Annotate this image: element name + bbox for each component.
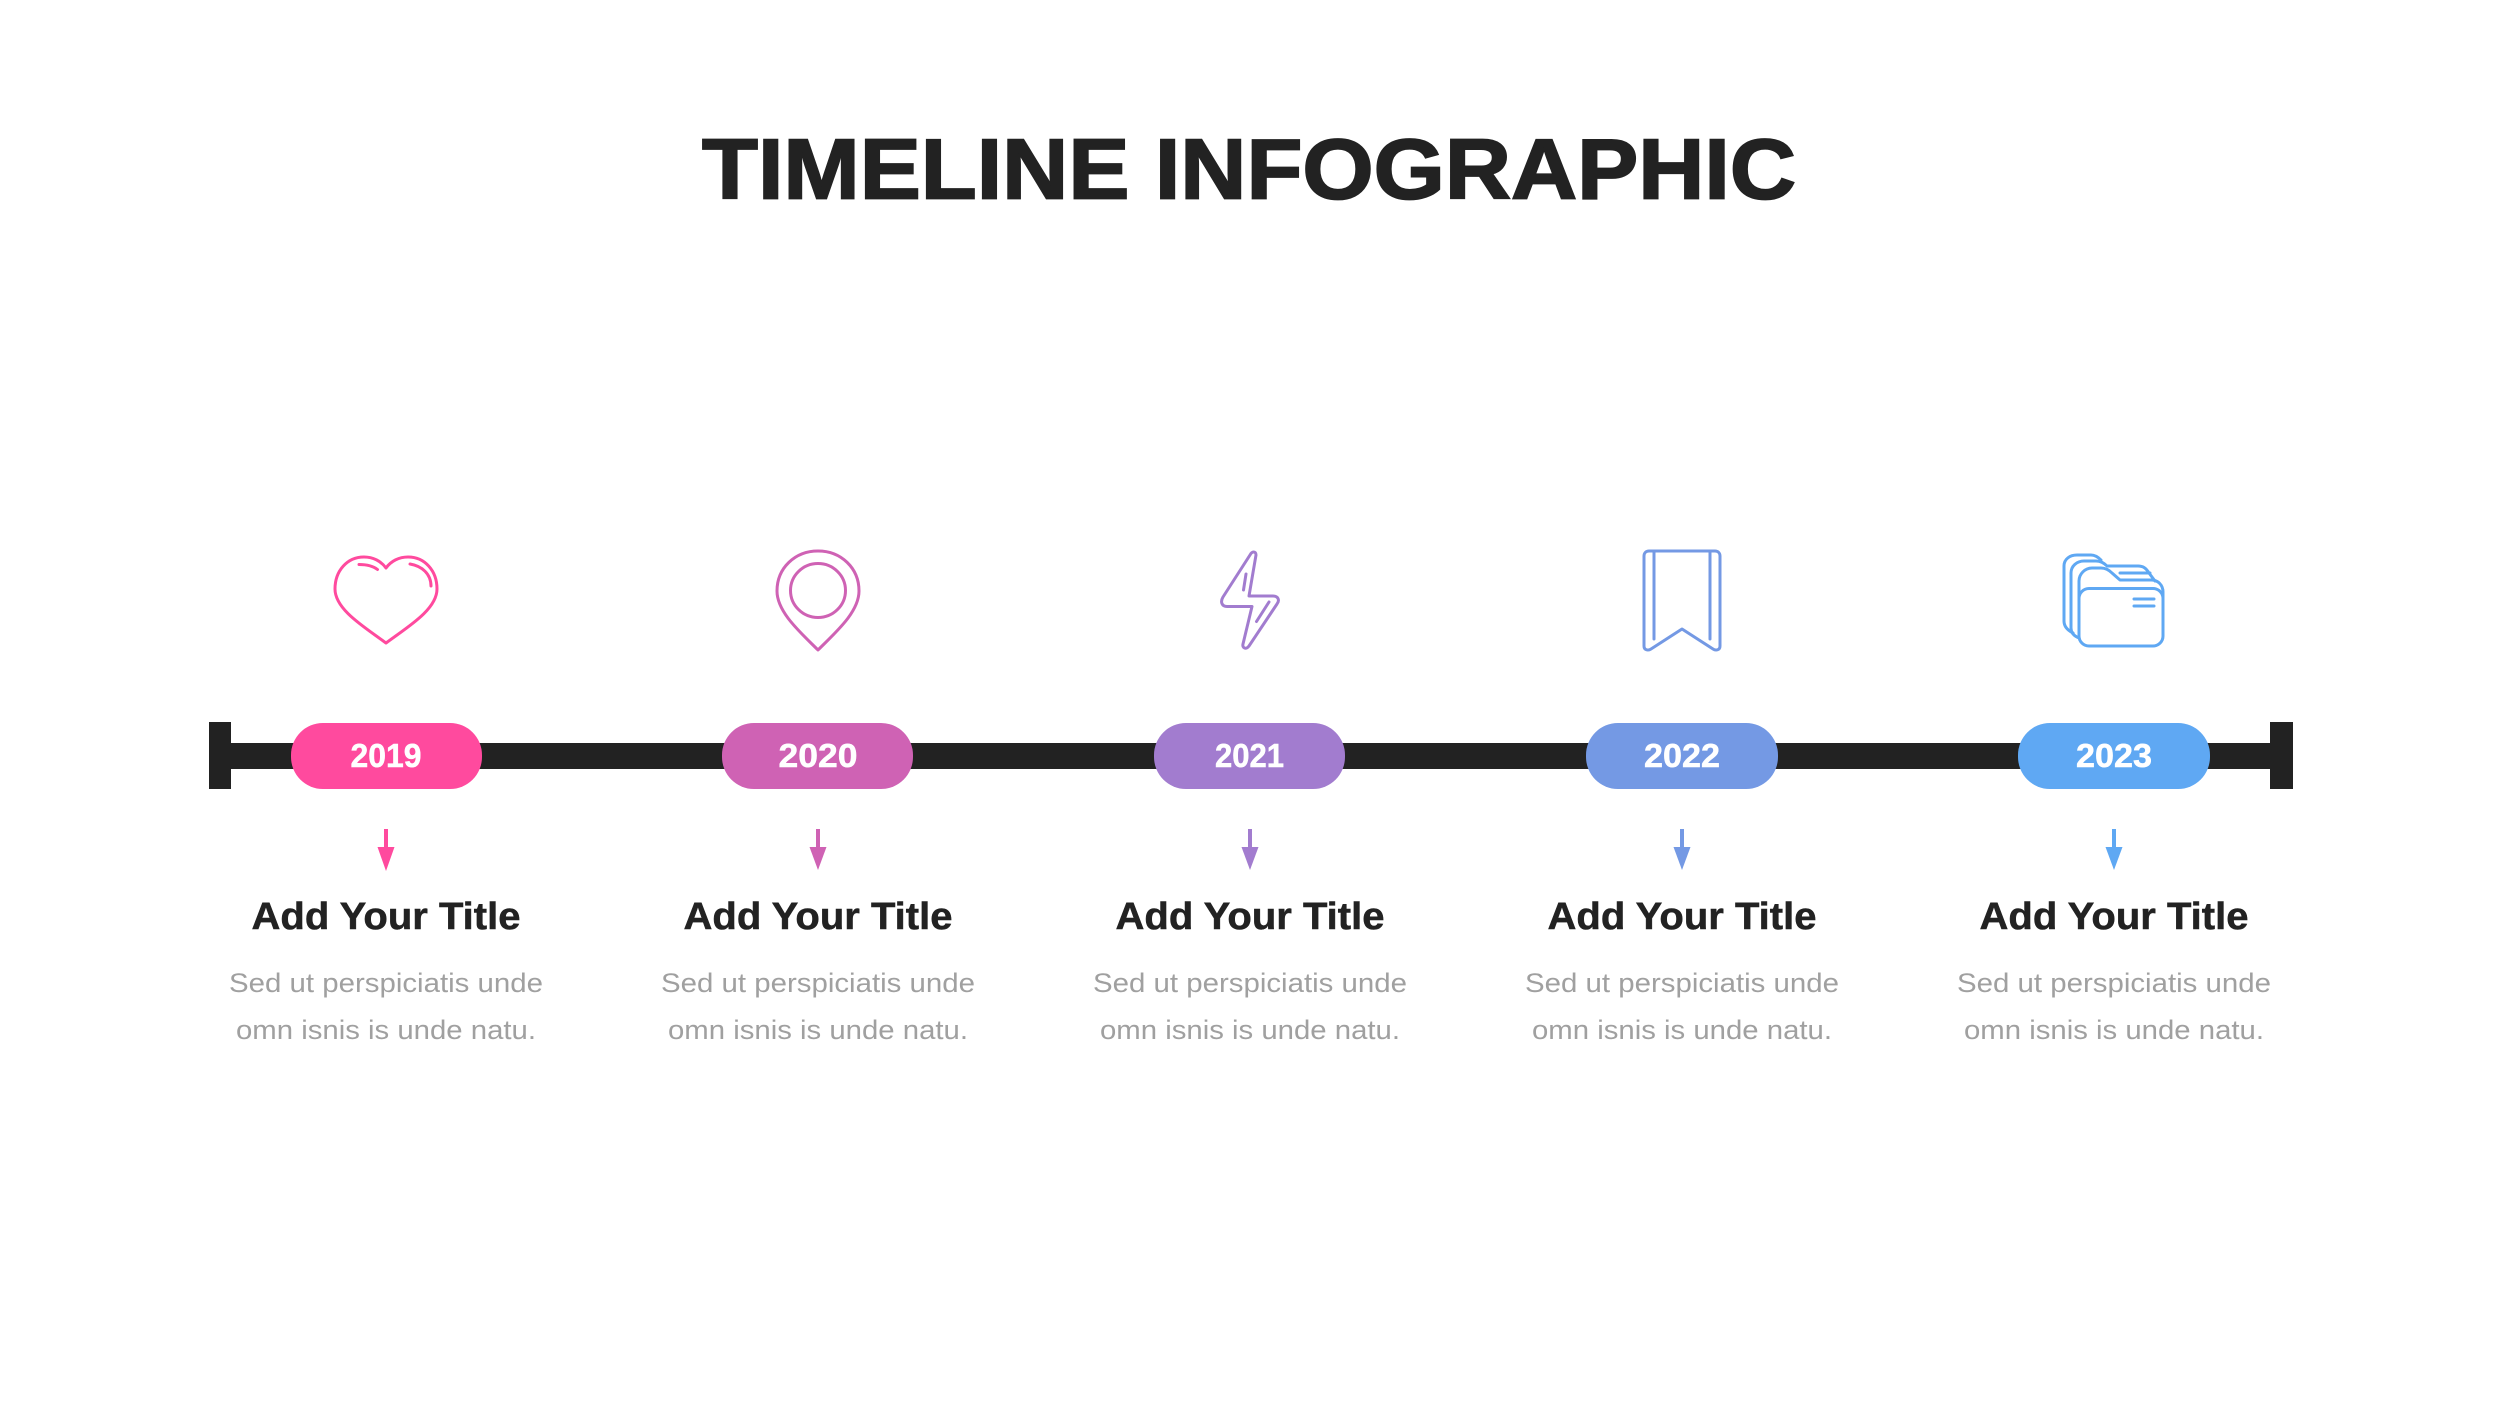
description (229, 968, 543, 1045)
item title: Add Your Title (684, 896, 952, 938)
description: omn isnis is unde natu. (1100, 1015, 1400, 1045)
description (1957, 968, 2271, 1045)
year pill: 2022 (1586, 723, 1778, 789)
arrow (1674, 829, 1690, 870)
icon: folders (2064, 555, 2163, 646)
description: omn isnis is unde natu. (236, 1015, 536, 1045)
arrow (810, 829, 826, 870)
year pill: 2021: 2021 (1215, 737, 1284, 774)
year pill: 2019: 2019 (350, 737, 422, 774)
description: Sed ut perspiciatis unde (1093, 968, 1407, 998)
panel: 2020 (661, 551, 975, 1045)
panel: 2023 (1957, 555, 2271, 1045)
arrow (378, 829, 394, 871)
year pill: 2023: 2023 (2076, 737, 2152, 774)
item title: Add Your Title (1548, 896, 1816, 938)
year pill: 2023 (2018, 723, 2210, 789)
panel: 2019 (229, 557, 543, 1045)
description: Sed ut perspiciatis unde (661, 968, 975, 998)
icon: lightning bolt (1222, 552, 1278, 648)
icon: bookmark (1644, 551, 1720, 650)
item title: Add Your Title (1980, 896, 2248, 938)
item title: Add Your Title (1116, 896, 1384, 938)
description (1525, 968, 1839, 1045)
item title: Add Your Title (252, 896, 520, 938)
arrow (1242, 829, 1258, 870)
description (1093, 968, 1407, 1045)
icon: location pin (777, 551, 859, 650)
description: Sed ut perspiciatis unde (1525, 968, 1839, 998)
year pill: 2022: 2022 (1644, 737, 1720, 774)
description: Sed ut perspiciatis unde (229, 968, 543, 998)
description: omn isnis is unde natu. (1964, 1015, 2264, 1045)
description: omn isnis is unde natu. (1532, 1015, 1832, 1045)
description: Sed ut perspiciatis unde (1957, 968, 2271, 998)
year pill: 2021 (1154, 723, 1345, 789)
year pill: 2020: 2020 (778, 737, 858, 774)
icon: heart (335, 557, 437, 643)
description (661, 968, 975, 1045)
panel: 2021 (1093, 552, 1407, 1045)
year pill: 2020 (722, 723, 913, 789)
description: omn isnis is unde natu. (668, 1015, 968, 1045)
title: TIMELINE INFOGRAPHIC (702, 122, 1796, 218)
arrow (2106, 829, 2122, 870)
panel: 2022 (1525, 551, 1839, 1045)
timeline bar (209, 722, 2293, 789)
year pill: 2019 (291, 723, 482, 789)
